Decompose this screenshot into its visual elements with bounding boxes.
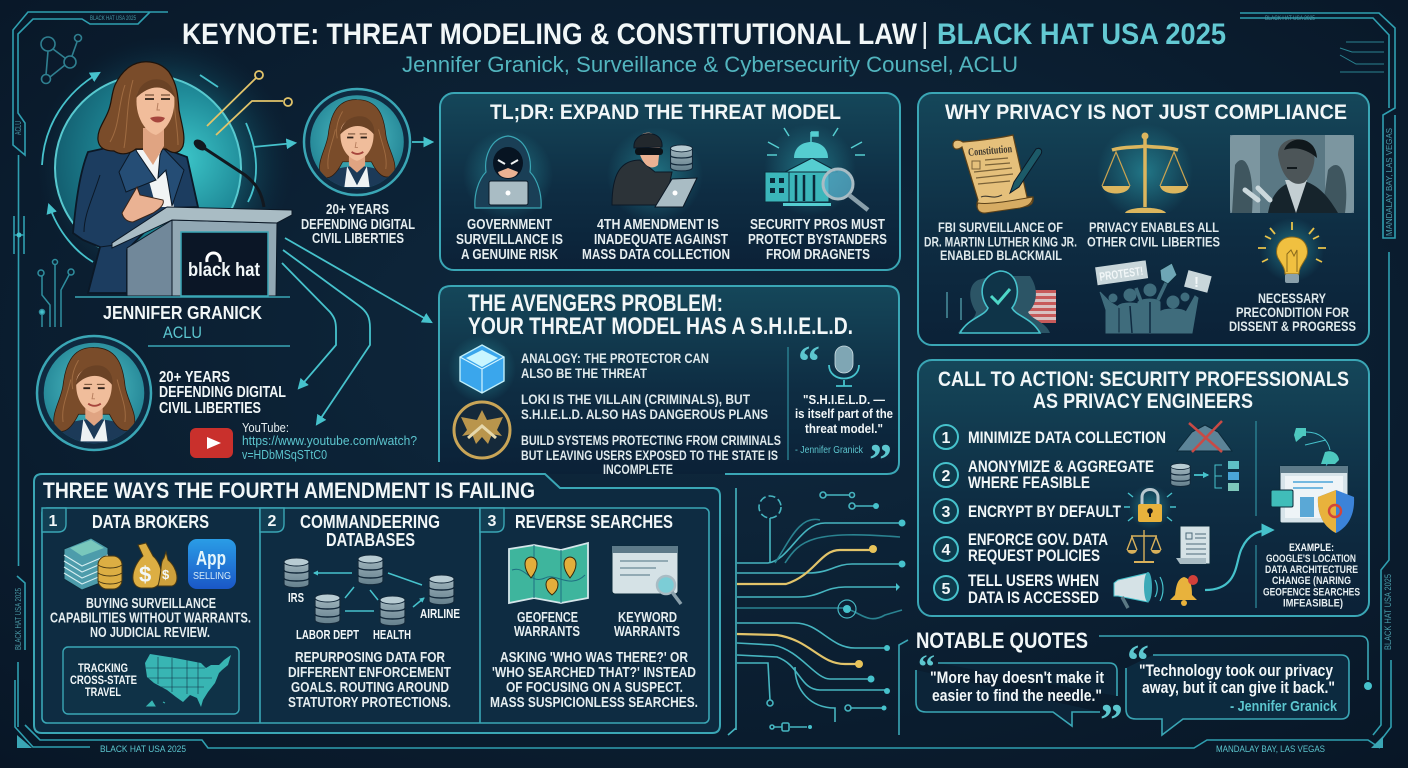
column 2: commandeering databases: COMMANDEERING (300, 512, 440, 532)
panel: call to action: GOOGLE'S LOCATION (1266, 553, 1356, 565)
step 4: 4 (942, 542, 951, 559)
portrait: upper: CIVIL LIBERTIES (312, 231, 404, 247)
circuit flow decoration (728, 488, 906, 735)
icon: keyword browser (612, 546, 681, 604)
arrows from speaker (253, 142, 432, 424)
quote: more hay (916, 649, 1123, 745)
quote: more hay: easier to find the needle." (932, 686, 1102, 705)
column 2: commandeering databases: 2 (268, 513, 277, 530)
step 2 (934, 458, 1239, 492)
panel: why privacy: PRIVACY ENABLES ALL (1089, 220, 1219, 235)
panel: Avengers problem: INCOMPLETE (603, 462, 673, 477)
step 4 (934, 526, 1210, 565)
youtube link (190, 420, 417, 462)
panel: Avengers problem: BUILD SYSTEMS PROTECTING FROM CRIMINALS (521, 433, 781, 448)
quote: technology: "Technology took our privacy (1139, 661, 1333, 680)
lapels (119, 146, 156, 192)
icon: geofence map (509, 543, 588, 603)
step 2: 2 (942, 468, 951, 485)
callout: tracking cross-state travel: CROSS-STATE (70, 673, 137, 687)
hair (98, 62, 184, 154)
panel: Avengers problem (439, 286, 899, 485)
icon: capitol with magnifier (764, 124, 868, 216)
diagram: linked databases: AIRLINE (420, 607, 460, 621)
icon: cash stack, coins, money bags, app: SELLING (193, 570, 231, 582)
speaker name: JENNIFER GRANICK (103, 302, 263, 323)
icon: circuit traces (38, 260, 74, 327)
panel: call to action: EXAMPLE: (1289, 542, 1334, 554)
icon: network nodes (41, 34, 82, 84)
panel: call to action: CHANGE (NARING (1272, 575, 1351, 587)
step 3 (934, 485, 1176, 529)
icon: silhouettes and flag (947, 271, 1056, 333)
youtube link: YouTube: (242, 420, 289, 435)
icon: light bulb (1258, 218, 1326, 283)
photo: Dr. King at microphones (1230, 135, 1354, 213)
panel: why privacy: NECESSARY (1258, 291, 1326, 306)
portrait: lower (37, 336, 286, 450)
icon: cash stack, coins, money bags, app (64, 538, 236, 590)
panel: Avengers problem: ANALOGY: THE PROTECTOR CAN (521, 351, 709, 366)
panel: TL;DR: 4TH AMENDMENT IS (597, 217, 719, 233)
subtitle: Jennifer Granick, Surveillance & Cybersecurity Counsel, ACLU (402, 52, 1018, 77)
panel: TL;DR: INADEQUATE AGAINST (594, 232, 728, 248)
quote marks: “ (798, 337, 820, 386)
decorative frame: BLACK HAT USA 2025 (1383, 574, 1393, 650)
portrait: lower: DEFENDING DIGITAL (159, 384, 286, 401)
jacket (73, 146, 198, 293)
panel: Avengers problem: - Jennifer Granick (795, 445, 864, 456)
callout: tracking cross-state travel (63, 647, 239, 714)
panel: Avengers problem: LOKI IS THE VILLAIN (CRIMINALS), BUT (521, 392, 751, 407)
icon: protest crowd: PROTEST! (1099, 264, 1144, 284)
diagram: linked databases: LABOR DEPT (296, 628, 359, 642)
panel: TL;DR: PROTECT BYSTANDERS (748, 232, 887, 248)
speaker name (75, 297, 290, 346)
column 3: reverse searches: 'WHO SEARCHED THAT?' INSTEAD (492, 665, 696, 681)
column 3: reverse searches: WARRANTS (514, 624, 580, 640)
title: | (921, 18, 929, 50)
column 3: reverse searches: OF FOCUSING ON A SUSPECT. (506, 680, 683, 696)
icon: shield emblem (454, 402, 510, 458)
portrait: lower: 20+ YEARS (159, 369, 230, 386)
column 3: reverse searches: 3 (488, 513, 497, 530)
microphone (198, 144, 264, 207)
step 5: 5 (942, 581, 951, 598)
panel: Avengers problem: threat model." (805, 421, 883, 436)
shirt (134, 150, 174, 207)
arrow to example (1205, 530, 1272, 590)
panel: call to action: AS PRIVACY ENGINEERS (1033, 389, 1253, 413)
callout: tracking cross-state travel: TRACKING (78, 661, 128, 675)
column 1: data brokers (42, 508, 251, 714)
panel: TL;DR: A GENUINE RISK (461, 247, 558, 263)
title: BLACK HAT USA 2025 (937, 18, 1226, 51)
icon: hooded hacker (463, 130, 553, 220)
icon: scales of justice (1097, 124, 1193, 220)
speaker illustration (37, 37, 293, 296)
column 2: commandeering databases: REPURPOSING DATA FOR (295, 650, 445, 666)
panel: call to action: DATA ARCHITECTURE (1265, 564, 1358, 576)
icon: cash stack, coins, money bags, app: $ (139, 562, 151, 587)
step 1: 1 (942, 430, 951, 447)
icon: microphone (829, 346, 859, 386)
panel: why privacy: DISSENT & PROGRESS (1229, 319, 1356, 334)
quote: more hay: ” (1100, 694, 1123, 745)
portrait: lower: CIVIL LIBERTIES (159, 400, 261, 417)
column 1: data brokers: NO JUDICIAL REVIEW. (90, 625, 210, 641)
panel: why privacy: WHY PRIVACY IS NOT JUST COMPLIANCE (945, 100, 1347, 124)
decorative frame: MANDALAY BAY, LAS VEGAS (1385, 128, 1394, 236)
column 2: commandeering databases: DIFFERENT ENFORCEMENT (288, 665, 451, 681)
panel: Avengers problem: S.H.I.E.L.D. ALSO HAS DANGEROUS PLANS (521, 407, 768, 422)
speaker illustration: black hat (188, 260, 261, 281)
column 3: reverse searches: REVERSE SEARCHES (515, 512, 673, 532)
decorative frame: BLACK HAT USA 2025 (90, 16, 136, 22)
decorative frame: MANDALAY BAY, LAS VEGAS (1216, 744, 1325, 755)
diagram: linked databases (284, 555, 460, 642)
quote: more hay: "More hay doesn't make it (930, 668, 1104, 687)
icon: protest crowd: ! (1194, 274, 1199, 291)
panel: why privacy (918, 93, 1369, 345)
diagram: linked databases: IRS (288, 591, 304, 605)
panel: Avengers problem: "S.H.I.E.L.D. — (803, 392, 885, 407)
panel: Avengers problem: YOUR THREAT MODEL HAS A S.H.I.E.L.D. (468, 313, 853, 340)
panel: Avengers problem: BUT LEAVING USERS EXPOSED TO THE STATE IS (521, 448, 778, 463)
column 2: commandeering databases: DATABASES (326, 530, 415, 550)
hand (122, 187, 163, 222)
gold circuit lines (207, 71, 292, 135)
youtube link: https://www.youtube.com/watch? (242, 433, 417, 448)
quote: more hay: “ (918, 649, 935, 686)
step 4: ENFORCE GOV. DATA (968, 531, 1108, 549)
icon: browser with shield (1271, 428, 1354, 533)
lectern (127, 220, 172, 296)
panel: TL;DR: SURVEILLANCE IS (456, 232, 563, 248)
panel: why privacy: ENABLED BLACKMAIL (940, 248, 1062, 263)
panel: Avengers problem: ” (869, 434, 892, 485)
quote: technology: - Jennifer Granick (1230, 698, 1338, 715)
neck and face (143, 128, 164, 165)
panel: TL;DR: GOVERNMENT (467, 217, 552, 233)
icon: burglar with laptop (607, 127, 703, 223)
column 2: commandeering databases: STATUTORY PROTECTIONS. (288, 695, 451, 711)
step 5: DATA IS ACCESSED (968, 589, 1099, 607)
panel: why privacy: FBI SURVEILLANCE OF (938, 220, 1063, 235)
column 1: data brokers: 1 (49, 513, 58, 530)
icon: constitution scroll (953, 135, 1042, 213)
panel: call to action: GEOFENCE SEARCHES (1263, 586, 1360, 598)
quote: technology: “ (1127, 636, 1149, 685)
step 5 (934, 572, 1198, 608)
icon: protest crowd (1095, 260, 1212, 333)
step 3: ENCRYPT BY DEFAULT (968, 503, 1121, 521)
quote: technology (1126, 636, 1349, 735)
title: KEYNOTE: THREAT MODELING & CONSTITUTIONAL LAW (182, 18, 918, 51)
panel: call to action (918, 360, 1369, 616)
panel: notable quotes: NOTABLE QUOTES (916, 628, 1088, 653)
panel: TL;DR: TL;DR: EXPAND THE THREAT MODEL (490, 100, 841, 124)
panel: call to action: IMFEASIBLE) (1283, 598, 1343, 610)
column 1: data brokers: DATA BROKERS (92, 512, 209, 532)
panel: Avengers problem: ALSO BE THE THREAT (521, 366, 648, 381)
icon: constitution scroll: Constitution (968, 143, 1013, 159)
decorative frame: BLACK HAT USA 2025 (1265, 16, 1316, 22)
step 2: ANONYMIZE & AGGREGATE (968, 458, 1154, 476)
step 1 (934, 421, 1232, 452)
panel: three ways the fourth amendment is failing: THREE WAYS THE FOURTH AMENDMENT IS FAILING (43, 478, 535, 503)
column 3: reverse searches: KEYWORD (618, 610, 677, 626)
column 3: reverse searches: GEOFENCE (517, 610, 578, 626)
panel: three ways the fourth amendment is failing (34, 474, 720, 733)
column 3: reverse searches: MASS SUSPICIONLESS SEARCHES. (490, 695, 698, 711)
diagram: linked databases: HEALTH (373, 628, 411, 642)
column 1: data brokers: CAPABILITIES WITHOUT WARRANTS. (50, 611, 251, 627)
column 3: reverse searches (480, 508, 698, 711)
step 2: WHERE FEASIBLE (968, 474, 1090, 492)
portrait: upper (301, 89, 415, 247)
speaker name: ACLU (163, 323, 202, 342)
step 1: MINIMIZE DATA COLLECTION (968, 429, 1166, 447)
panel: TL;DR: MASS DATA COLLECTION (582, 247, 730, 263)
panel: Avengers problem: THE AVENGERS PROBLEM: (468, 290, 723, 317)
decorative frame: BLACK HAT USA 2025 (14, 588, 23, 650)
panel: why privacy: DR. MARTIN LUTHER KING JR. (924, 234, 1077, 250)
icon: cash stack, coins, money bags, app: $ (162, 567, 170, 582)
panel: Avengers problem: is itself part of the (795, 406, 893, 421)
panel: TL;DR: FROM DRAGNETS (766, 247, 870, 263)
callout: tracking cross-state travel: TRAVEL (85, 685, 121, 699)
column 1: data brokers: BUYING SURVEILLANCE (86, 596, 216, 612)
decorative frame: ACLU (14, 121, 23, 135)
panel: notable quotes (899, 628, 1372, 745)
column 2: commandeering databases: GOALS. ROUTING AROUND (291, 680, 449, 696)
panel: why privacy: OTHER CIVIL LIBERTIES (1087, 234, 1220, 250)
panel: TL;DR (440, 93, 900, 270)
step 4: REQUEST POLICIES (968, 547, 1100, 565)
quote: technology: away, but it can give it back." (1142, 678, 1335, 697)
step 5: TELL USERS WHEN (968, 572, 1099, 590)
decorative frame: BLACK HAT USA 2025 (100, 744, 186, 755)
panel: TL;DR: SECURITY PROS MUST (750, 217, 885, 233)
youtube link: v=HDbMSqSTtC0 (242, 447, 327, 462)
portrait: upper: 20+ YEARS (326, 202, 389, 218)
icon: tesseract cube (448, 335, 516, 403)
step 3: 3 (942, 504, 951, 521)
column 3: reverse searches: ASKING 'WHO WAS THERE?' OR (500, 650, 688, 666)
column 2: commandeering databases (260, 508, 460, 711)
portrait: upper: DEFENDING DIGITAL (301, 217, 415, 233)
icon: cash stack, coins, money bags, app: App (196, 548, 226, 570)
column 3: reverse searches: WARRANTS (614, 624, 680, 640)
panel: why privacy: PRECONDITION FOR (1236, 305, 1349, 320)
